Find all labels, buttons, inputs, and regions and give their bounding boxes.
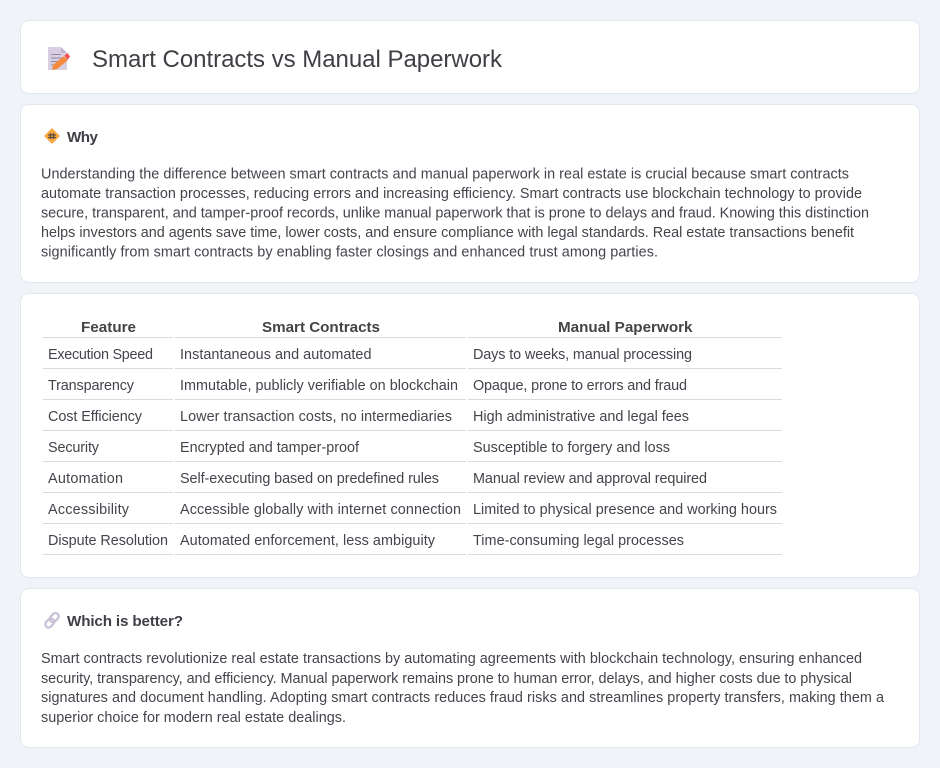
text block: why explanation bbox=[41, 166, 869, 260]
row: execution speed bbox=[48, 347, 692, 363]
row: execution speed: Days to weeks, manual processing bbox=[473, 347, 692, 363]
row: execution speed: Instantaneous and automated bbox=[180, 347, 372, 363]
row: dispute resolution: Dispute Resolution bbox=[48, 533, 168, 549]
panel: comparison table bbox=[20, 294, 920, 578]
table header bbox=[81, 319, 693, 336]
table header: Manual Paperwork bbox=[558, 319, 693, 336]
row: dispute resolution: Time-consuming legal processes bbox=[473, 533, 684, 549]
row: cost efficiency: High administrative and legal fees bbox=[473, 409, 689, 425]
row: automation: Manual review and approval required bbox=[473, 471, 707, 487]
row: security: Security bbox=[48, 440, 100, 456]
heading: which is better: Which is better? bbox=[67, 613, 183, 630]
panel: which is better bbox=[20, 588, 920, 748]
icon: document with pencil bbox=[48, 47, 70, 70]
panel: why bbox=[20, 104, 920, 282]
heading: why: Why bbox=[67, 129, 99, 146]
row: security: Encrypted and tamper-proof bbox=[180, 440, 360, 456]
row: accessibility: Accessibility bbox=[48, 502, 130, 518]
title: Smart Contracts vs Manual Paperwork bbox=[92, 46, 503, 73]
row: transparency: Immutable, publicly verifiable on blockchain bbox=[180, 378, 458, 394]
text block: why explanation: helps investors and agents save time, lower costs, and ensure compliance with legal standards. Real estate transactions benefit bbox=[41, 225, 854, 241]
row: transparency: Opaque, prone to errors and fraud bbox=[473, 378, 687, 394]
table header: Feature bbox=[81, 319, 136, 336]
row: accessibility: Limited to physical presence and working hours bbox=[473, 502, 777, 518]
table header: Smart Contracts bbox=[262, 319, 380, 336]
row: automation bbox=[48, 471, 707, 487]
row: automation: Automation bbox=[48, 471, 123, 487]
row: transparency: Transparency bbox=[48, 378, 135, 394]
row: cost efficiency: Lower transaction costs, no intermediaries bbox=[180, 409, 452, 425]
icon: chain link bbox=[44, 612, 60, 629]
text block: verdict: superior choice for modern real estate dealings. bbox=[41, 710, 346, 726]
row: cost efficiency bbox=[48, 409, 689, 425]
row: cost efficiency: Cost Efficiency bbox=[48, 409, 143, 425]
text block: why explanation: automate transaction processes, reducing errors and increasing efficiency. Smart contracts use blockchain technology to provide bbox=[41, 186, 862, 202]
row: accessibility bbox=[48, 502, 777, 518]
text block: verdict: security, transparency, and efficiency. Manual paperwork remains prone to human error, delays, and higher costs due to physical bbox=[41, 671, 852, 687]
row: dispute resolution bbox=[48, 533, 684, 549]
text block: verdict: signatures and document handling. Adopting smart contracts reduces fraud risks and streamlines property transfers, making them a bbox=[41, 690, 884, 706]
text block: verdict: Smart contracts revolutionize real estate transactions by automating agreements with blockchain technology, ensuring enhanced bbox=[41, 651, 862, 667]
row: security bbox=[48, 440, 670, 456]
icon: warning diamond bbox=[45, 129, 59, 143]
text block: verdict bbox=[41, 651, 884, 726]
row: transparency bbox=[48, 378, 687, 394]
text block: why explanation: Understanding the difference between smart contracts and manual paperwork in real estate is crucial because smart contracts bbox=[41, 166, 849, 182]
text block: why explanation: significantly from smart contracts by enabling faster closings and enhanced trust among parties. bbox=[41, 244, 658, 260]
row: dispute resolution: Automated enforcement, less ambiguity bbox=[180, 533, 436, 549]
panel: title header bbox=[20, 20, 920, 94]
row: automation: Self-executing based on predefined rules bbox=[180, 471, 439, 487]
row: accessibility: Accessible globally with internet connection bbox=[180, 502, 461, 518]
row: execution speed: Execution Speed bbox=[48, 347, 153, 363]
text block: why explanation: secure, transparent, and tamper-proof records, unlike manual paperwork that is prone to delays and fraud. Knowing this distinction bbox=[41, 206, 869, 222]
row: security: Susceptible to forgery and loss bbox=[473, 440, 670, 456]
